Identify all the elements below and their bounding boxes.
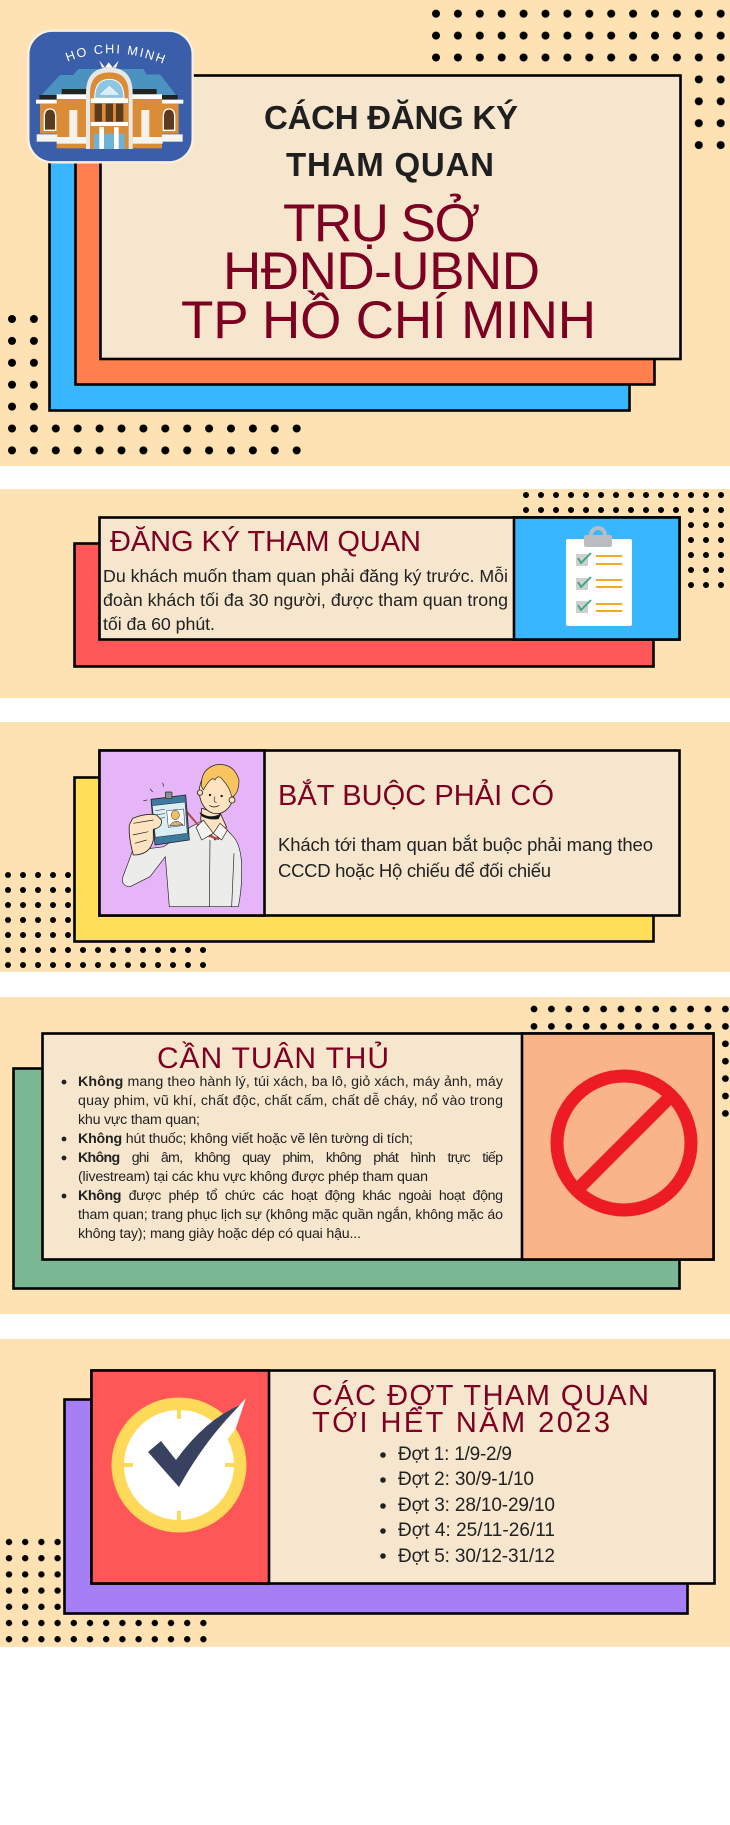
dates list: Đợt 2: 30/9-1/10: [398, 1469, 534, 1490]
rules list: Không hút thuốc; không viết hoặc vẽ lên tường di tích;: [78, 1131, 413, 1147]
panel: register to visit: [0, 488, 730, 698]
panel: header: [0, 0, 730, 466]
icon: clock with check mark: [112, 1398, 246, 1532]
panel: must have: [0, 722, 730, 972]
heading: CÁC ĐỢT THAM QUAN: [312, 1379, 649, 1412]
icon: clipboard checklist: [566, 528, 632, 626]
rules list: (livestream) tại các khu vực không được phép tham quan: [78, 1169, 428, 1185]
title: how to register: THAM QUAN: [286, 146, 494, 183]
text block: Du khách muốn tham quan phải đăng ký trước. Mỗi: [103, 565, 508, 586]
rules list: Không được phép tổ chức các hoạt động khác ngoài hoạt động: [78, 1188, 503, 1204]
icon: Ho Chi Minh city hall logo: HO CHI MINH: [66, 44, 166, 64]
rules list: khu vực tham quan;: [78, 1112, 200, 1128]
title: headquarters name: [181, 193, 596, 350]
rules list: tham quan; trang phục lịch sự (không mặc quần ngắn, không mặc áo: [78, 1206, 503, 1223]
title: how to register: CÁCH ĐĂNG KÝ: [264, 99, 518, 136]
title: headquarters name: TRỤ SỞ: [283, 193, 480, 253]
icon: Ho Chi Minh city hall logo: [27, 30, 194, 164]
rules list: Không mang theo hành lý, túi xách, ba lô, giỏ xách, máy ảnh, máy: [78, 1074, 504, 1090]
text block: tối đa 60 phút.: [103, 614, 215, 634]
dates list: Đợt 3: 28/10-29/10: [398, 1495, 555, 1516]
heading: CẦN TUÂN THỦ: [157, 1041, 389, 1075]
heading: ĐĂNG KÝ THAM QUAN: [110, 525, 421, 558]
panel: rules to follow: [0, 997, 730, 1314]
dates list: Đợt 5: 30/12-31/12: [398, 1546, 555, 1567]
heading: BẮT BUỘC PHẢI CÓ: [278, 778, 554, 812]
rules list: quay phim, vũ khí, chất độc, chất cấm, chất dễ cháy, nổ vào trong: [78, 1092, 503, 1109]
dates list: Đợt 4: 25/11-26/11: [398, 1520, 555, 1541]
text block: đoàn khách tối đa 30 người, được tham quan trong: [103, 590, 508, 610]
heading: TỚI HẾT NĂM 2023: [312, 1405, 610, 1439]
text block: [103, 565, 508, 634]
rules list: [62, 1074, 504, 1242]
rules list: không tay); mang giày hoặc dép có quai hậu...: [78, 1226, 361, 1242]
illustration: man holding ID badge: [122, 764, 242, 907]
text block: Khách tới tham quan bắt buộc phải mang theo: [278, 834, 653, 855]
panel: visit dates: [0, 1339, 730, 1647]
title: headquarters name: HĐND-UBND: [223, 242, 540, 301]
title: how to register: [264, 99, 518, 183]
dates list: [380, 1444, 555, 1567]
heading: [312, 1379, 649, 1439]
icon: prohibition sign: [557, 1076, 691, 1210]
text block: [278, 834, 653, 881]
text block: CCCD hoặc Hộ chiếu để đối chiếu: [278, 860, 551, 881]
dates list: Đợt 1: 1/9-2/9: [398, 1444, 512, 1465]
title: headquarters name: TP HỒ CHÍ MINH: [181, 290, 596, 350]
rules list: Không ghi âm, không quay phim, không phát hình trực tiếp: [78, 1150, 503, 1166]
